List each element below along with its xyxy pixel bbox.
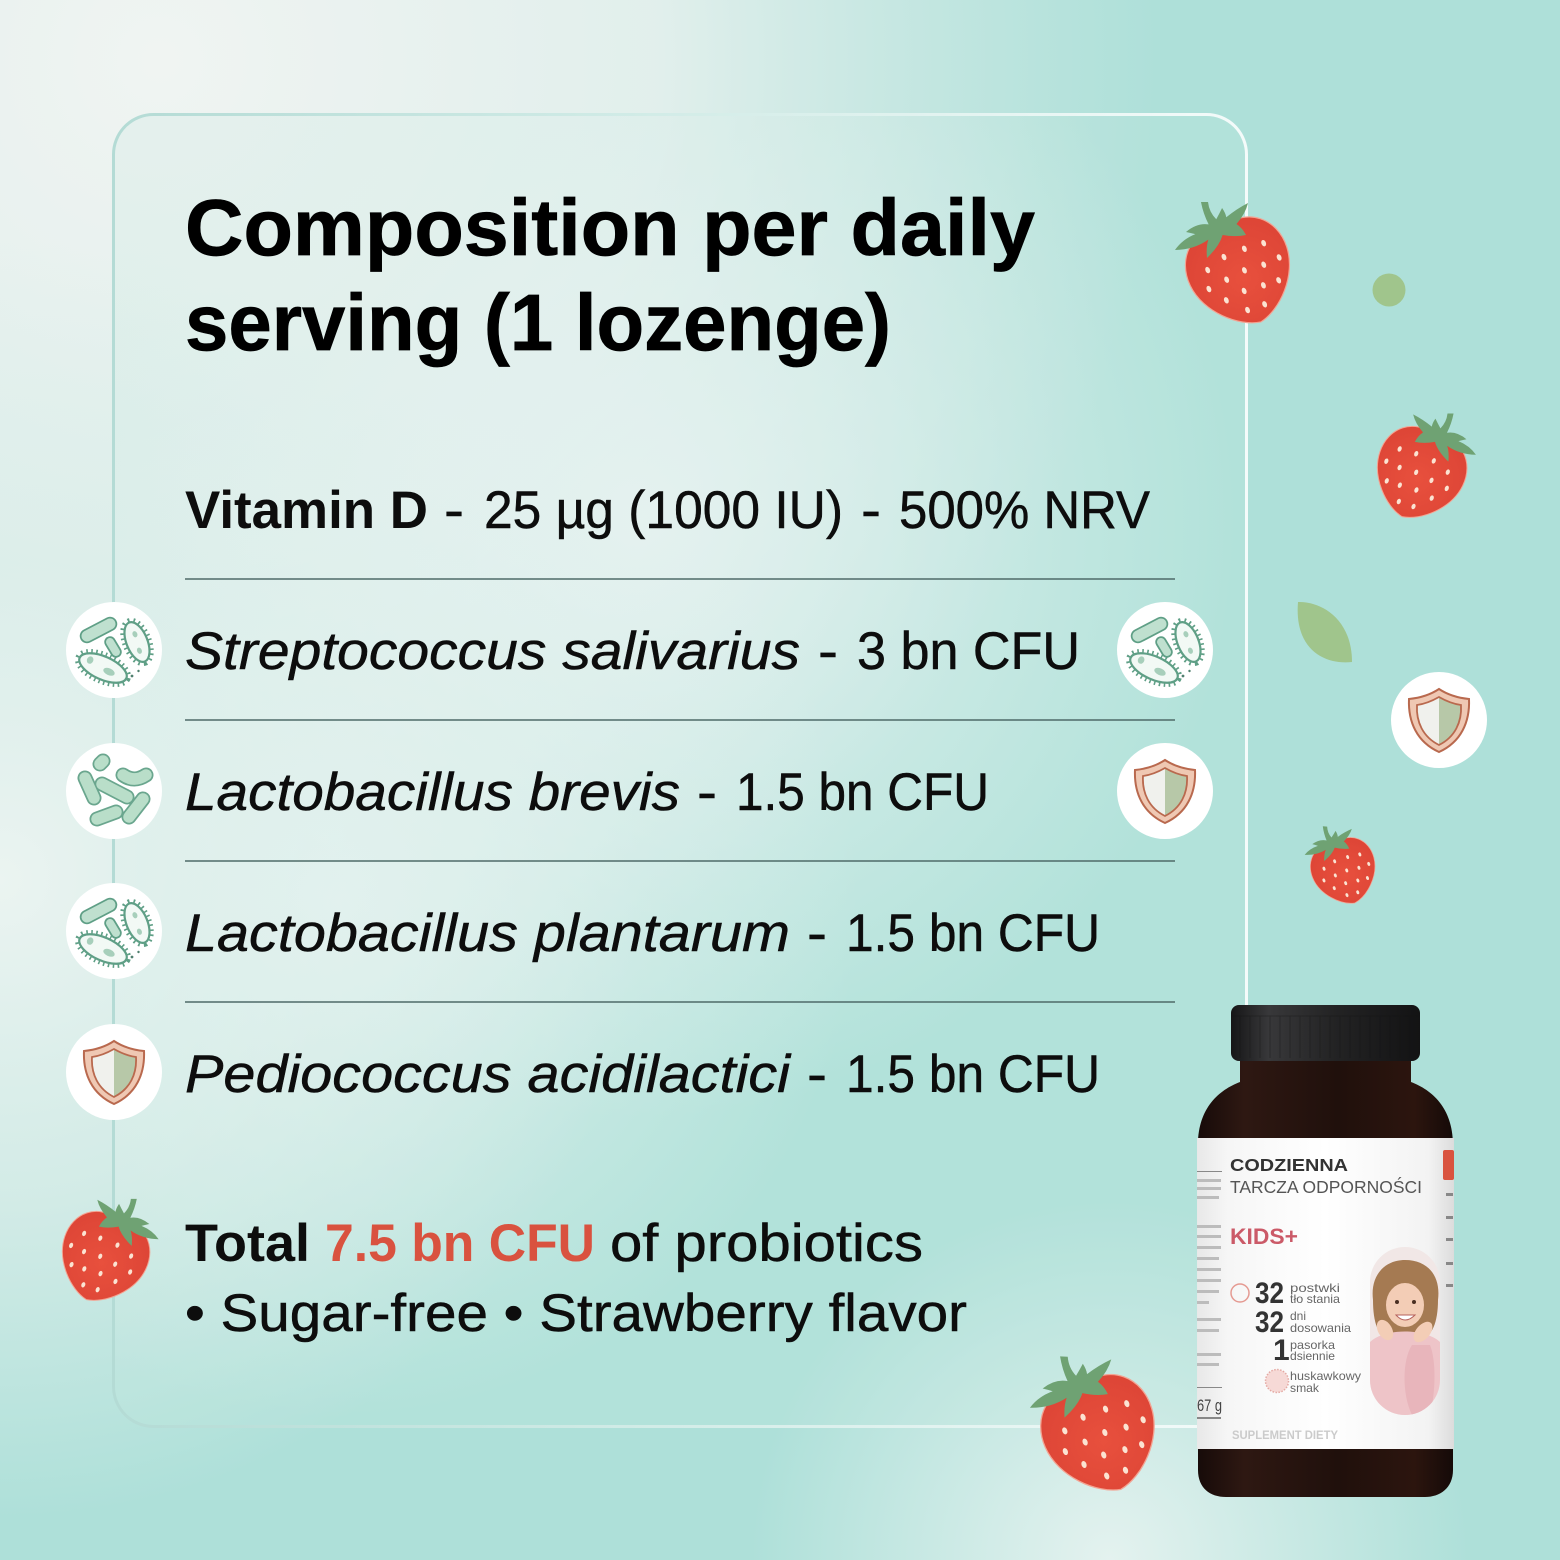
label facts: dni	[1290, 1309, 1306, 1323]
label facts: tło stania	[1290, 1292, 1340, 1306]
label child photo	[1370, 1247, 1440, 1415]
row: Lactobacillus plantarum: -	[807, 904, 827, 963]
product bottle	[1197, 1005, 1454, 1497]
total summary	[185, 1214, 967, 1343]
title: Composition per daily	[185, 183, 1036, 272]
icon: shield right	[1117, 743, 1213, 839]
total summary: • Sugar-free • Strawberry flavor	[185, 1284, 967, 1343]
row dividers	[185, 579, 1175, 1002]
bottle cap	[1231, 1005, 1420, 1061]
bottle glass	[1198, 1060, 1453, 1497]
strawberry upper right	[1360, 393, 1487, 534]
row: Pediococcus acidilactici: Pediococcus acidilactici	[185, 1045, 791, 1104]
total summary: of probiotics	[610, 1214, 923, 1273]
label facts	[1197, 1277, 1361, 1442]
row: Streptococcus salivarius: Streptococcus salivarius	[185, 622, 800, 681]
row: Streptococcus salivarius	[185, 622, 1080, 681]
label facts: 1	[1273, 1334, 1290, 1367]
label facts: 67 g	[1197, 1396, 1222, 1415]
icon: germs left 3	[66, 883, 162, 979]
row: vitamin D: 500% NRV	[899, 481, 1151, 540]
row: vitamin D: Vitamin D	[185, 481, 428, 540]
row: vitamin D: -	[861, 481, 881, 540]
row: vitamin D	[185, 481, 1151, 540]
icon: germs left 1	[66, 602, 162, 698]
bottle label	[1197, 1138, 1454, 1449]
icon: germs right	[1117, 602, 1213, 698]
row: vitamin D: -	[444, 481, 464, 540]
label heading: KIDS+	[1230, 1224, 1298, 1249]
label heading: CODZIENNA	[1230, 1155, 1348, 1175]
label facts: dsiennie	[1290, 1349, 1335, 1363]
row: Lactobacillus brevis: Lactobacillus brevis	[185, 763, 680, 822]
total summary: 7.5 bn CFU	[325, 1214, 595, 1273]
row: Lactobacillus plantarum: 1.5 bn CFU	[846, 904, 1100, 963]
label heading: TARCZA ODPORNOŚCI	[1230, 1176, 1422, 1197]
row: Lactobacillus brevis	[185, 763, 989, 822]
label facts: SUPLEMENT DIETY	[1232, 1428, 1338, 1442]
title: serving (1 lozenge)	[185, 278, 891, 367]
panel: glass card	[114, 114, 1246, 1426]
row: Lactobacillus brevis: 1.5 bn CFU	[736, 763, 989, 822]
row: vitamin D: 25 µg (1000 IU)	[484, 481, 843, 540]
strawberry top	[1162, 178, 1309, 342]
row: Streptococcus salivarius: 3 bn CFU	[857, 622, 1080, 681]
row: Pediococcus acidilactici	[185, 1045, 1100, 1104]
icon: shield left 4	[66, 1024, 162, 1120]
icon: shield floating	[1391, 672, 1487, 768]
strawberry bottom	[1017, 1333, 1174, 1509]
strawberry left	[46, 1179, 170, 1316]
label heading	[1230, 1155, 1422, 1249]
row: Pediococcus acidilactici: -	[807, 1045, 827, 1104]
total summary: Total	[185, 1214, 310, 1273]
label side print	[1197, 1150, 1454, 1419]
row: Lactobacillus plantarum	[185, 904, 1100, 963]
label facts: dosowania	[1290, 1321, 1351, 1335]
row: Streptococcus salivarius: -	[818, 622, 838, 681]
strawberry middle right	[1298, 814, 1385, 913]
label facts: postwki	[1290, 1281, 1340, 1295]
label facts: 32	[1255, 1306, 1284, 1339]
row: Lactobacillus brevis: -	[697, 763, 717, 822]
row: Pediococcus acidilactici: 1.5 bn CFU	[846, 1045, 1100, 1104]
green leaf	[1298, 602, 1352, 662]
title	[185, 183, 1036, 367]
green dot	[1372, 274, 1406, 306]
label facts: smak	[1290, 1381, 1320, 1395]
icon: rods left 2	[66, 743, 162, 839]
row: Lactobacillus plantarum: Lactobacillus plantarum	[185, 904, 790, 963]
label facts: huskawkowy	[1290, 1369, 1361, 1383]
label facts: pasorka	[1290, 1338, 1335, 1352]
label facts: 32	[1255, 1277, 1284, 1310]
